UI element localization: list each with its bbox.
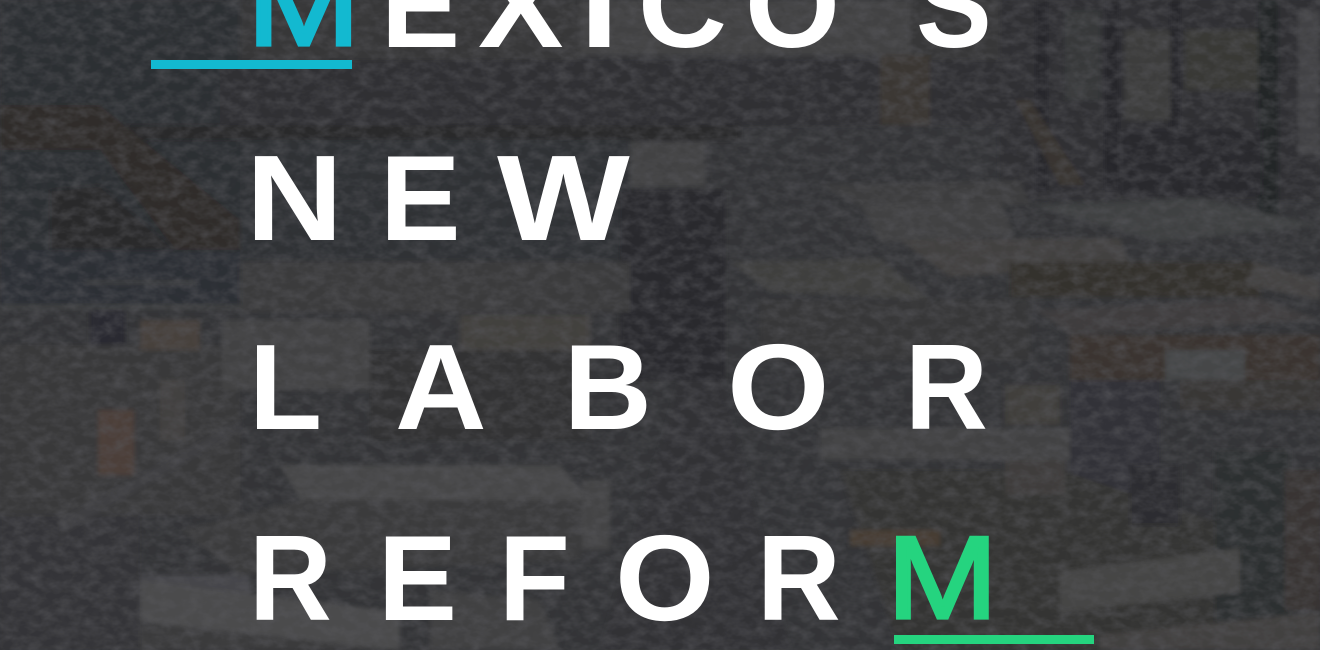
center left stalls [240, 262, 630, 312]
title line: REFORM: O [615, 510, 714, 646]
title line: REFORM: R [249, 510, 332, 646]
accent underline: green [894, 635, 1094, 644]
title line: LABOR: L [249, 319, 322, 455]
title line: MEXICO'S [247, 0, 991, 73]
title line: NEW: W [497, 130, 629, 266]
right columns and upper right [1000, 0, 1320, 200]
accent underline: blue [151, 60, 352, 69]
title line: LABOR [249, 319, 988, 455]
title line: REFORM: M [887, 513, 998, 643]
title line: NEW: N [246, 130, 343, 266]
title: Mexico's New Labor Reform [151, 0, 1094, 646]
right roofs [820, 180, 1030, 205]
title line: LABOR: A [395, 319, 487, 455]
aisle [600, 380, 790, 650]
title line: NEW [246, 130, 630, 266]
title line: LABOR: B [564, 319, 652, 455]
title line: REFORM [249, 510, 998, 646]
title line: LABOR: O [727, 319, 829, 455]
title line: REFORM: F [499, 510, 570, 646]
title line: REFORM: R [757, 510, 841, 646]
title line: REFORM: E [378, 510, 457, 646]
upper band [0, 0, 240, 250]
title line: NEW: E [380, 130, 461, 266]
left stairs [50, 185, 175, 250]
lower right [840, 470, 1240, 650]
title line: LABOR: R [905, 319, 988, 455]
